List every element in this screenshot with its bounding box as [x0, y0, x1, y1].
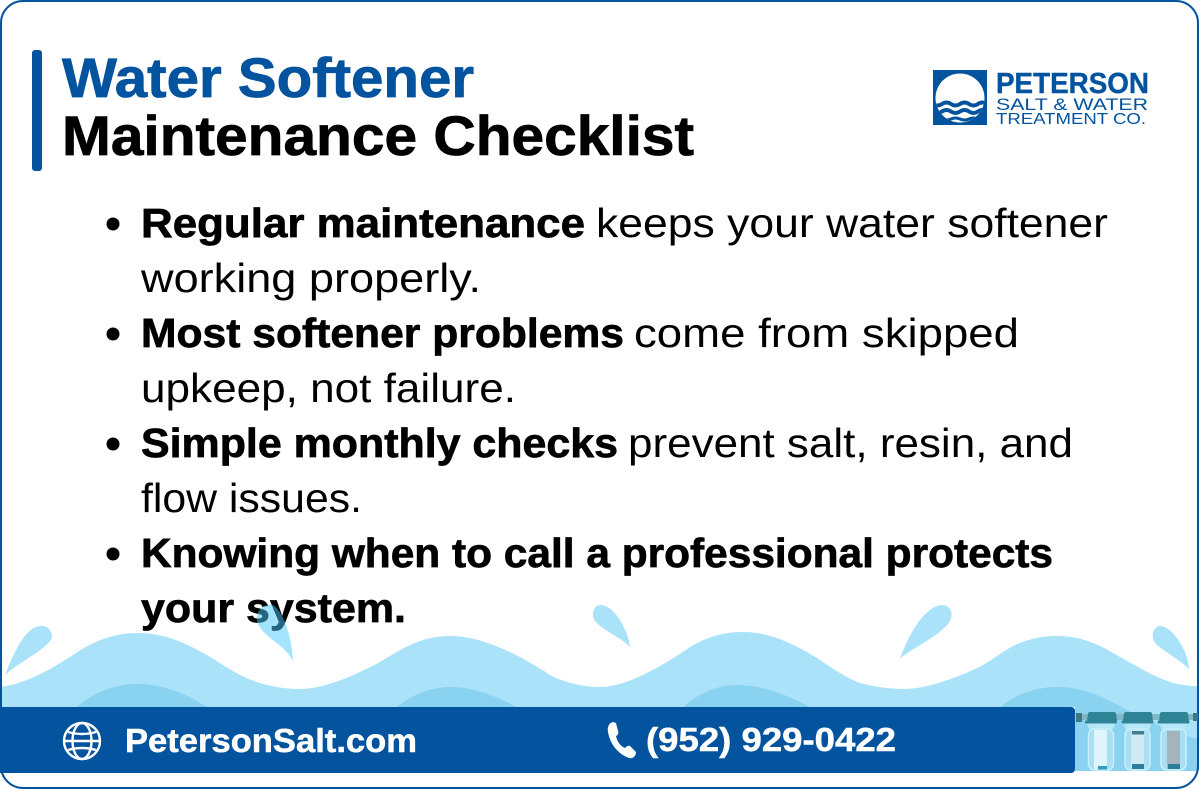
bullet 1: Regular maintenance [141, 200, 585, 246]
water droplet 1 [5, 626, 52, 675]
bullet 2: Most softener problems [141, 310, 624, 356]
website: PetersonSalt.com [125, 722, 417, 759]
bullet 3: Simple monthly checks [141, 420, 618, 466]
title: Maintenance Checklist [62, 104, 694, 167]
water droplet 4 [900, 605, 952, 659]
logo: Peterson Salt & Water Treatment Co.: PETERSON [996, 68, 1149, 100]
title accent bar [32, 50, 42, 171]
title: Water Softener [62, 46, 474, 109]
water droplet 2 overlapping text [257, 605, 293, 661]
icon: water filter cartridges [1076, 712, 1198, 770]
title [62, 46, 694, 167]
bullet 1: working properly. [140, 255, 481, 301]
bullet 1 [106, 200, 1108, 301]
bullet 1: keeps your water softener [596, 200, 1108, 246]
logo: Peterson Salt & Water Treatment Co.: TREATMENT CO. [996, 111, 1146, 128]
filter 3 [1158, 712, 1190, 770]
logo: Peterson Salt & Water Treatment Co. [933, 68, 1149, 128]
bullet 2: upkeep, not failure. [141, 365, 516, 411]
bullet 4 [106, 530, 1053, 631]
bullet 3: prevent salt, resin, and [628, 420, 1073, 466]
bullet 3: flow issues. [141, 475, 362, 521]
bullet list [106, 200, 1108, 631]
footer bar [0, 707, 1075, 773]
filter 1 [1085, 712, 1117, 770]
phone number: (952) 929-0422 [646, 721, 896, 758]
icon: phone [608, 722, 636, 758]
decorative waves background [0, 632, 1198, 771]
water droplet 3 [593, 605, 630, 647]
water droplet 5 [1153, 626, 1189, 669]
bullet 3 [106, 420, 1073, 521]
icon: globe [64, 723, 100, 759]
bullet 2 [106, 310, 1019, 411]
bullet 2: come from skipped [634, 310, 1019, 356]
filter 2 [1122, 712, 1154, 770]
logo: Peterson Salt & Water Treatment Co.: SALT & WATER [996, 95, 1148, 114]
bullet 4: your system. [141, 585, 406, 631]
bullet 4: Knowing when to call a professional protects [141, 530, 1053, 576]
